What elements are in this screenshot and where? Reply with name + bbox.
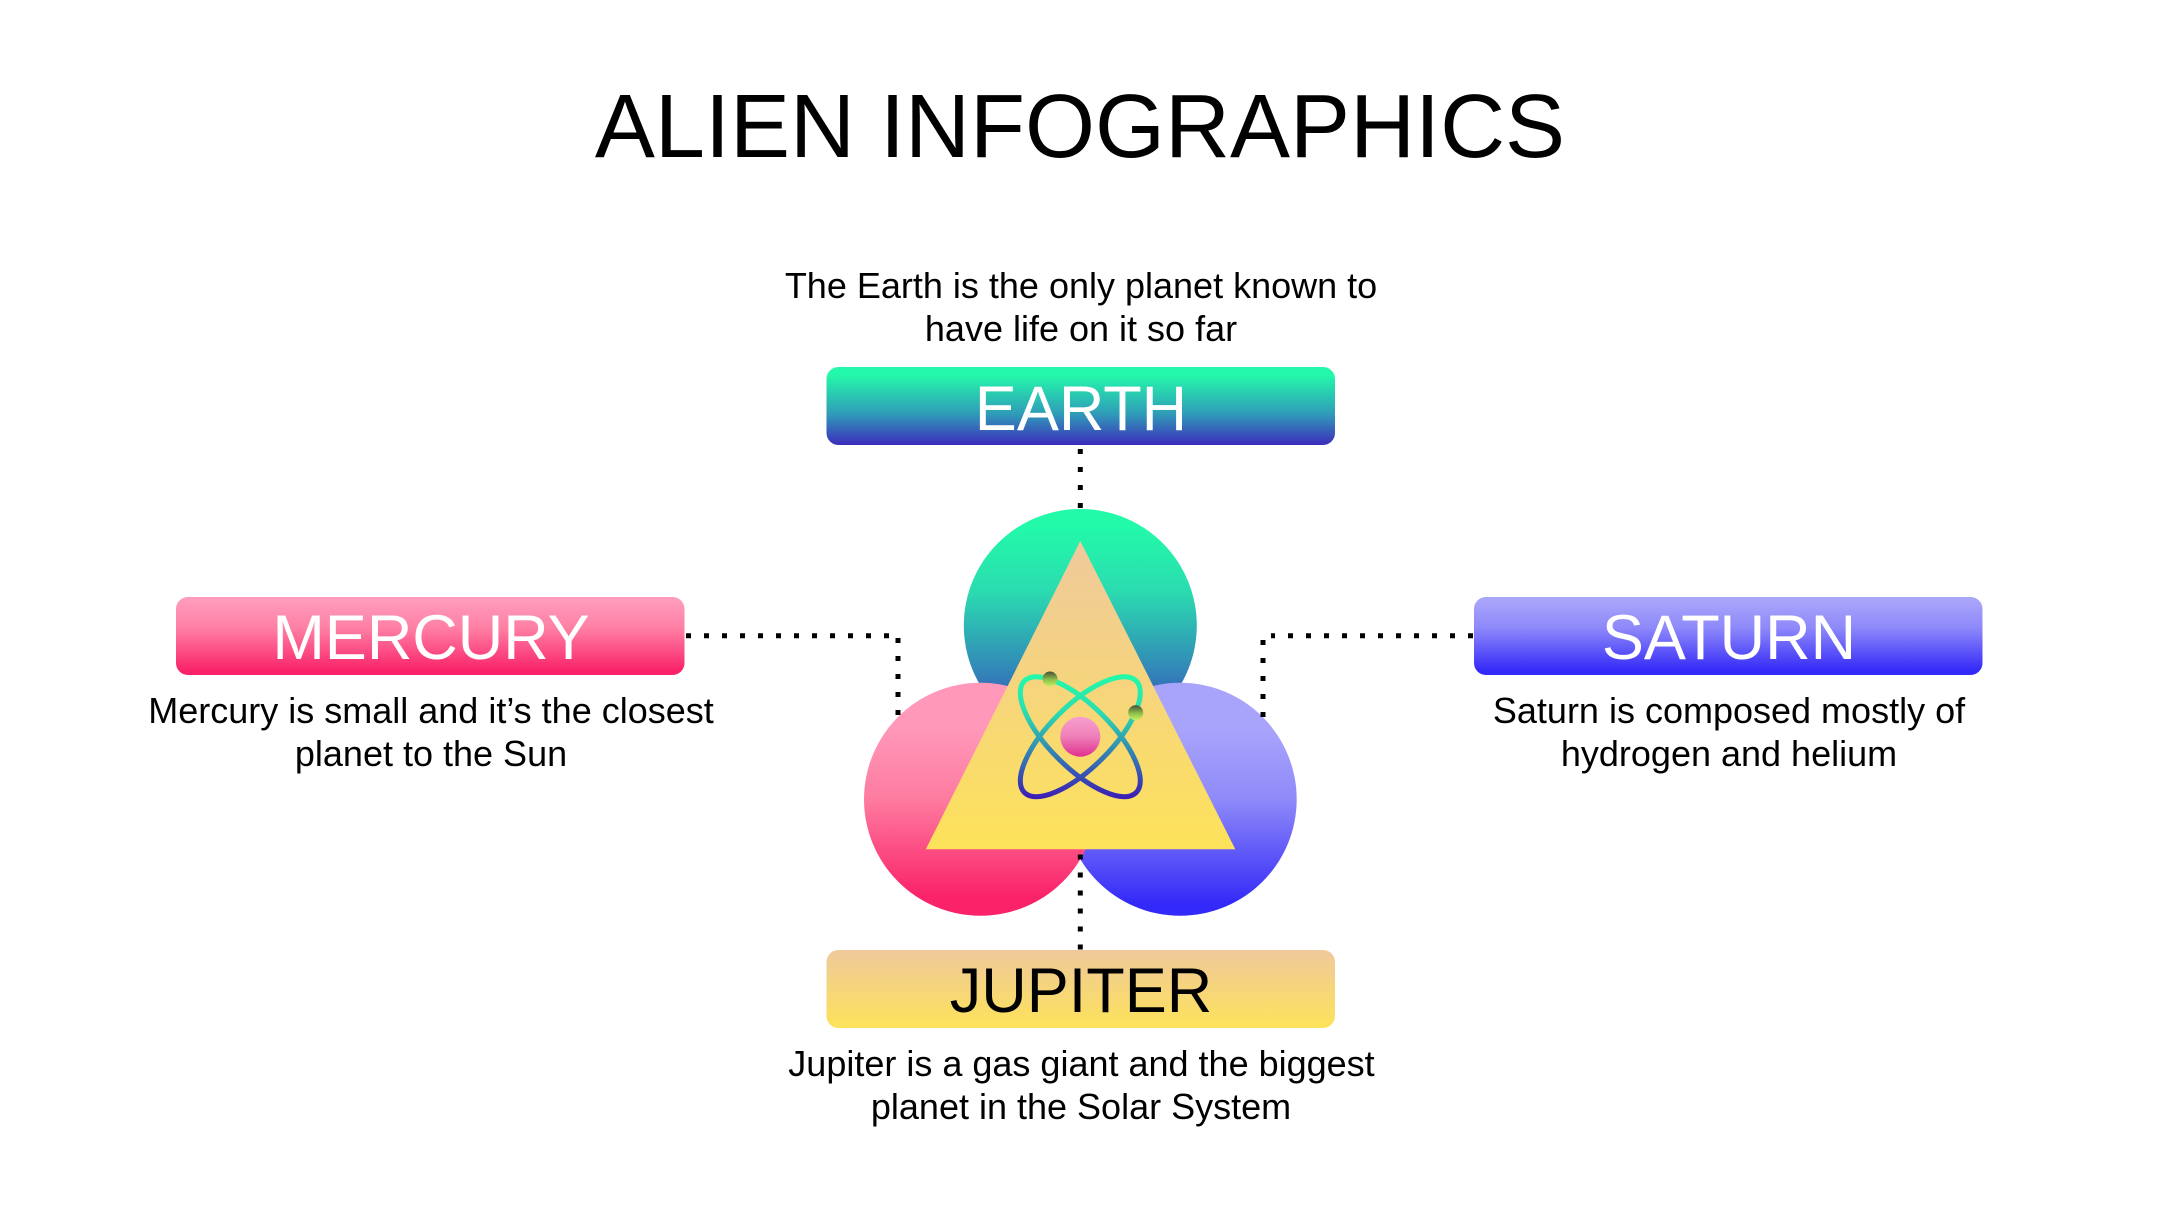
diagram: three overlapping circles	[864, 509, 1297, 916]
text: Mercury description	[148, 690, 714, 774]
label: Earth	[826, 367, 1335, 445]
label: Saturn	[1474, 597, 1982, 675]
text: Jupiter description: Jupiter is a gas giant and the biggest	[788, 1043, 1375, 1084]
text: Earth description: have life on it so far	[925, 308, 1237, 349]
label: Jupiter	[826, 950, 1335, 1028]
text: Saturn description: Saturn is composed mostly of	[1493, 690, 1966, 731]
text: Jupiter description	[788, 1043, 1375, 1127]
text: Saturn description: hydrogen and helium	[1561, 733, 1897, 774]
text: Earth description: The Earth is the only planet known to	[785, 265, 1377, 306]
label: Mercury: MERCURY	[272, 603, 590, 673]
connector: Earth	[1078, 449, 1083, 512]
connector: Saturn	[1263, 636, 1473, 718]
title: ALIEN INFOGRAPHICS	[595, 77, 1565, 177]
label: Mercury	[176, 597, 684, 675]
text: Mercury description: Mercury is small and it’s the closest	[148, 690, 714, 731]
icon: atom	[1003, 659, 1158, 814]
text: Earth description	[785, 265, 1377, 349]
label: Earth: EARTH	[975, 374, 1187, 444]
connector: Jupiter	[1078, 854, 1083, 950]
label: Jupiter: JUPITER	[950, 956, 1212, 1026]
text: Jupiter description: planet in the Solar System	[871, 1086, 1291, 1127]
text: Mercury description: planet to the Sun	[295, 733, 567, 774]
triangle	[926, 541, 1235, 849]
text: Saturn description	[1493, 690, 1966, 774]
connector: Mercury	[686, 636, 898, 716]
label: Saturn: SATURN	[1602, 603, 1856, 673]
